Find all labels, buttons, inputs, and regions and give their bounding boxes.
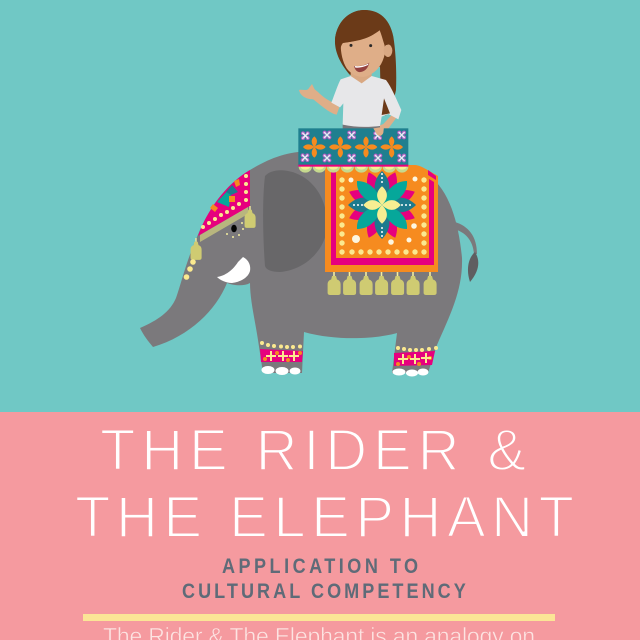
yellow divider xyxy=(83,614,555,621)
elephant body xyxy=(140,151,462,373)
subtitle: CULTURAL COMPETENCY xyxy=(182,580,466,603)
face xyxy=(341,30,385,77)
eyes and mouth xyxy=(349,44,372,72)
trunk beads xyxy=(184,259,196,280)
mandala xyxy=(347,170,417,240)
left arm and hand xyxy=(299,84,339,115)
teal background xyxy=(0,0,640,412)
title xyxy=(75,418,574,550)
pink panel xyxy=(0,412,640,640)
cloth tassels xyxy=(191,206,256,260)
shirt xyxy=(331,76,401,127)
saddle blanket xyxy=(325,165,438,272)
elephant xyxy=(140,151,478,376)
title: THE RIDER & xyxy=(100,418,526,483)
rider xyxy=(299,10,401,136)
fringe xyxy=(335,10,393,58)
blanket tassels xyxy=(328,272,437,295)
subtitle: APPLICATION TO xyxy=(222,555,418,578)
fingers over box xyxy=(373,127,384,136)
waist xyxy=(343,124,380,131)
ear xyxy=(263,170,327,272)
front leg band xyxy=(260,341,303,375)
title: THE ELEPHANT xyxy=(75,485,574,550)
subtitle xyxy=(182,555,466,603)
blanket stars xyxy=(348,176,418,245)
head cloth xyxy=(198,170,250,242)
orange crosses xyxy=(303,136,403,158)
hair lock xyxy=(382,98,390,115)
purple flowers xyxy=(301,131,406,162)
patterned rider box xyxy=(298,127,408,173)
ear xyxy=(384,44,392,57)
blanket dots xyxy=(339,177,427,255)
right hand xyxy=(373,115,397,136)
tail xyxy=(454,222,478,282)
hair back xyxy=(335,10,396,115)
tusk xyxy=(217,257,250,283)
neck xyxy=(351,68,372,87)
scallops xyxy=(299,161,408,173)
eye xyxy=(226,222,244,238)
back leg band xyxy=(392,346,438,376)
